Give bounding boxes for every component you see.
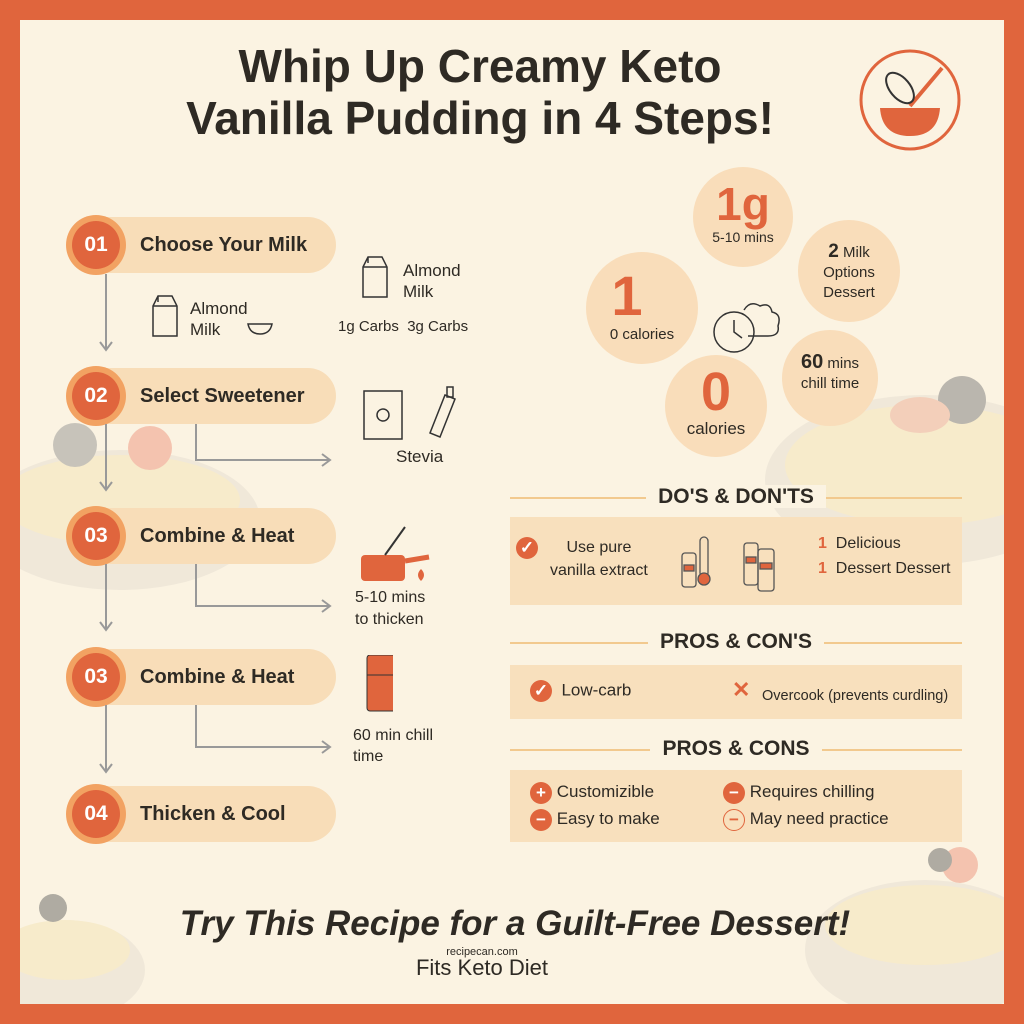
pros & con's box: ✕ <box>732 677 750 702</box>
sweetener icons <box>363 386 456 466</box>
pros & con's box: Overcook (prevents curdling) <box>762 688 948 704</box>
icon: clock <box>713 303 780 353</box>
pros & cons box: Customizible <box>557 782 654 801</box>
pros & cons box: − <box>536 810 546 829</box>
pros & cons header: PROS & CONS <box>662 737 810 760</box>
step 1 details: Milk <box>190 320 220 339</box>
text: 1 <box>611 264 643 327</box>
do's box: vanilla extract <box>550 562 648 579</box>
text: 1g Carbs 3g Carbs <box>338 318 468 335</box>
text: chill time <box>801 375 859 392</box>
stat circles: 1g <box>716 178 770 230</box>
text: 60 mins <box>801 351 859 373</box>
do's box <box>510 517 962 605</box>
step 4: Thicken & Cool <box>140 803 286 825</box>
do's header: DO'S & DON'TS <box>658 485 814 508</box>
step 2: 02 <box>84 384 108 407</box>
milk options <box>338 256 468 335</box>
step 4 <box>68 786 336 842</box>
do's box: 1 Delicious <box>818 535 901 552</box>
step 1: Choose Your Milk <box>140 234 307 256</box>
text: Dessert <box>823 284 875 301</box>
footer subtitle: Fits Keto Diet <box>416 955 548 980</box>
step 3b: Combine & Heat <box>140 666 294 688</box>
step 1: 01 <box>84 233 108 256</box>
pros & con's box: Low-carb <box>561 680 631 699</box>
title: Whip Up Creamy Keto <box>238 40 722 92</box>
text: 0 calories <box>610 326 674 343</box>
do's box: ✓ <box>520 538 534 557</box>
pros & cons box: − <box>729 810 739 829</box>
footer tagline: Try This Recipe for a Guilt-Free Dessert! <box>180 904 850 943</box>
step 1 details <box>152 295 273 339</box>
sweetener icons: Stevia <box>396 447 443 466</box>
step 3b: 03 <box>84 665 108 688</box>
fridge icon: 60 min chill <box>353 727 433 744</box>
pros & cons box <box>510 770 962 842</box>
fridge icon <box>353 655 433 765</box>
milk options: Milk <box>403 282 433 301</box>
title: Vanilla Pudding in 4 Steps! <box>186 92 774 144</box>
pros & cons box: Easy to make <box>557 809 660 828</box>
stat circles: 5-10 mins <box>712 229 774 245</box>
heat icon <box>355 526 430 628</box>
icon: whisk bowl logo <box>860 50 960 150</box>
text: 0 <box>701 362 731 422</box>
text: 2 Milk <box>828 241 870 262</box>
heat icon: 5-10 mins <box>355 589 425 606</box>
pros & con's box: ✓ <box>534 681 548 700</box>
step 4: 04 <box>84 802 108 825</box>
step 3: 03 <box>84 524 108 547</box>
do's box: 1 Dessert Dessert <box>818 560 950 577</box>
fridge icon: time <box>353 748 383 765</box>
milk options: Almond <box>403 261 461 280</box>
step 2: Select Sweetener <box>140 385 305 407</box>
step 2 <box>68 368 336 424</box>
text: calories <box>687 419 745 438</box>
heat icon: to thicken <box>355 611 423 628</box>
text: Options <box>823 264 875 281</box>
pros & cons box: Requires chilling <box>750 782 874 801</box>
footer url: recipecan.com <box>446 946 518 958</box>
stat circles <box>693 167 793 267</box>
step 3b <box>68 649 336 705</box>
step 3 <box>68 508 336 564</box>
arrows connecting steps <box>99 274 332 774</box>
step 1 details: Almond <box>190 299 248 318</box>
pros & cons box: − <box>729 783 739 802</box>
pros & con's header: PROS & CON'S <box>660 630 812 653</box>
step 1 <box>68 217 336 273</box>
pros & cons box: May need practice <box>750 809 889 828</box>
step 3: Combine & Heat <box>140 525 294 547</box>
do's box: Use pure <box>566 539 631 556</box>
title <box>186 40 774 144</box>
pros & con's box <box>510 665 962 719</box>
pros & cons box: + <box>536 783 546 802</box>
